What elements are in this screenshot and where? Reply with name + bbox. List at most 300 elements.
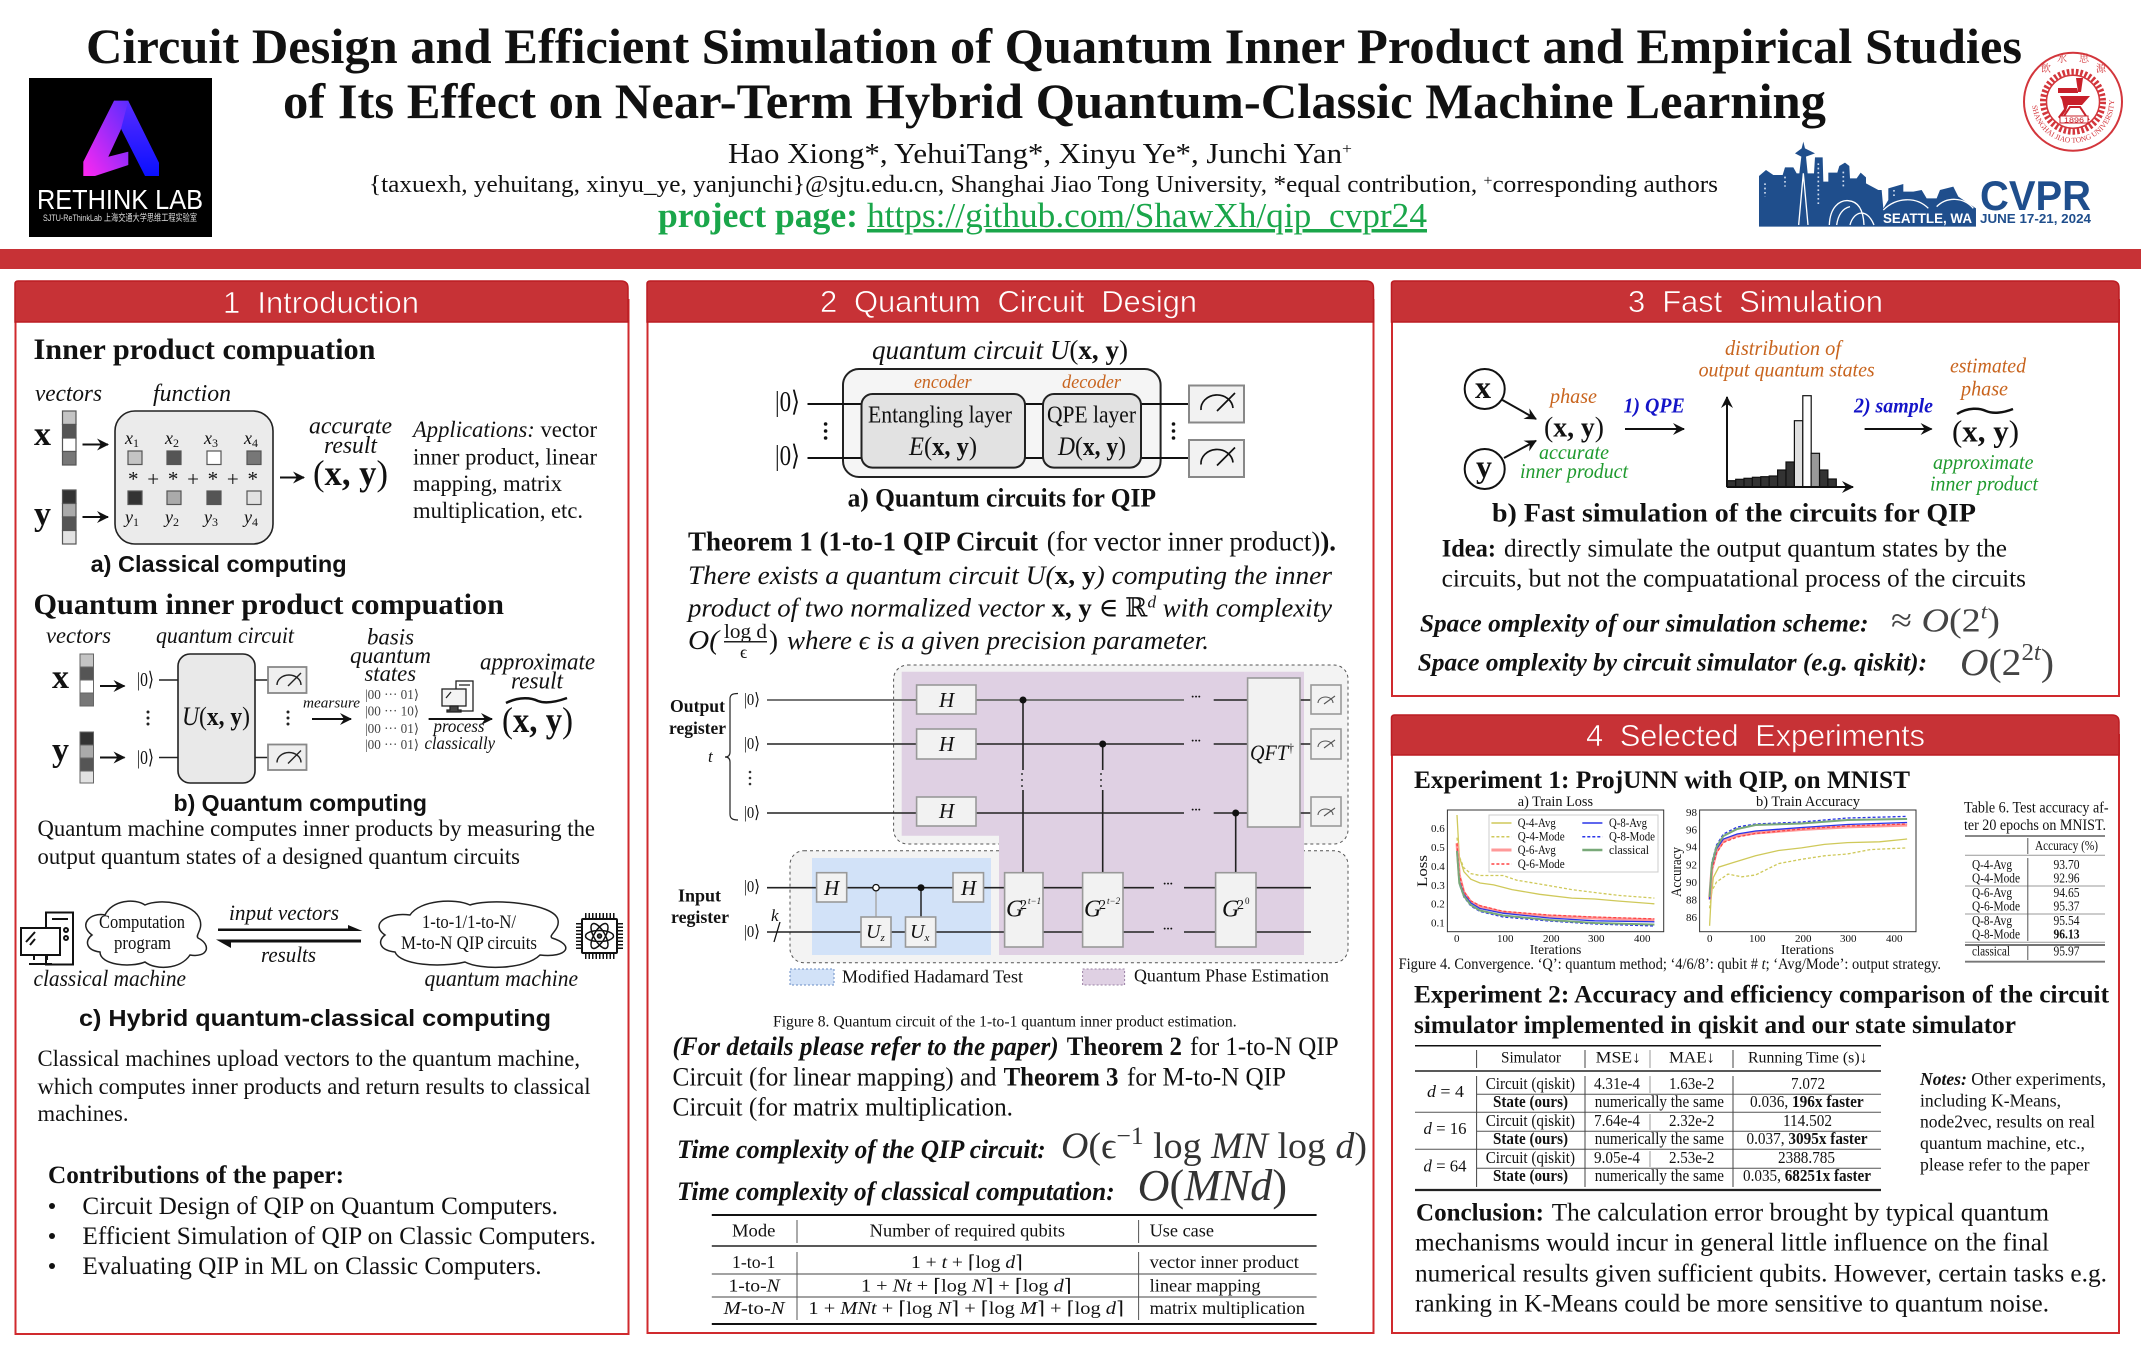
table: simulator comparison: 7.64e-4: [1594, 1111, 1640, 1130]
table: simulator comparison: MSE↓: [1596, 1050, 1641, 1067]
chart: train loss: 0.1: [1431, 918, 1445, 930]
caption: b) Quantum computing: b) Quantum computing: [174, 790, 427, 816]
gates: controlled G powers: 2: [1237, 898, 1244, 913]
table: QIP modes: M-to-N: [723, 1298, 786, 1318]
chart: train accuracy: 88: [1686, 894, 1698, 906]
text: applications: inner product, linear: [413, 444, 597, 470]
table: simulator comparison: d = 16: [1424, 1119, 1466, 1138]
text: notes: [1919, 1069, 2106, 1175]
chart: train accuracy: 0: [1707, 933, 1713, 945]
table 6: test accuracy: 94.65: [2054, 886, 2080, 901]
text: conclusion: mechanisms would incur in general little influence on the final: [1415, 1230, 2049, 1257]
diagram: b) quantum computing: quantum circuit: [156, 623, 295, 648]
chart legend: Q-6-Mode: [1518, 857, 1565, 871]
chart: quantum circuit of 1-to-1 QIP: |0⟩: [744, 734, 760, 753]
gates: Hadamard: H: [823, 876, 841, 900]
cloud: QIP circuits: M-to-N QIP circuits: [401, 933, 537, 954]
chart legend: Q-4-Avg: [1518, 816, 1556, 830]
chart: train loss: Loss: [1415, 855, 1431, 887]
diagram: c) hybrid computing: quantum machine: [424, 966, 578, 991]
diagram: b) quantum computing: |00 ··· 10⟩: [365, 704, 419, 718]
table: simulator comparison: 114.502: [1783, 1111, 1832, 1130]
diagram: c) hybrid computing: classical machine: [34, 966, 186, 991]
panel: 3 Fast Simulation: [1392, 281, 2119, 696]
heading: Experiment 1: Experiment 1: ProjUNN with QIP, on MNIST: [1414, 765, 1910, 794]
panel header: Fast Simulation: 3 Fast Simulation: [1628, 284, 1883, 319]
diagram: b) fast simulation: estimated: [1950, 354, 2026, 378]
chart: train accuracy: [1669, 794, 1916, 958]
diagram: b) fast simulation: 2) sample: [1853, 394, 1933, 418]
table: simulator comparison: MAE↓: [1669, 1050, 1715, 1067]
panel header: Introduction: 1 Introduction: [223, 285, 419, 320]
diagram: a) classical computing: y: [125, 507, 133, 527]
table: QIP modes: 1-to-N: [728, 1276, 781, 1296]
caption: figure 4: Figure 4. Convergence. ‘Q’: quantum method; ‘4/6/8’: qubit # t; ‘Avg/Mode’: output strategy.: [1399, 956, 1941, 973]
title: of Its Effect on Near-Term Hybrid Quantum-Classic Machine Learning: [283, 73, 1826, 129]
table: simulator comparison: 0.037, 3095x faster: [1746, 1129, 1868, 1148]
table 6: test accuracy: 92.96: [2054, 872, 2080, 887]
text: time complexity: Time complexity of the QIP circuit:: [677, 1135, 1046, 1164]
diagram: a) classical computing: x: [204, 428, 212, 448]
table: simulator comparison: Circuit (qiskit): [1486, 1074, 1575, 1093]
cloud: computation program: Computation: [99, 912, 185, 933]
legend: circuit regions: [790, 966, 1329, 987]
caption: c) Hybrid quantum-classical computing: c) Hybrid quantum-classical computing: [79, 1005, 551, 1031]
logo: Shanghai Jiao Tong University seal: 思: [2079, 50, 2090, 65]
table: simulator comparison: d = 4: [1427, 1082, 1465, 1101]
diagram: b) quantum computing: [46, 623, 595, 816]
diagram: b) quantum computing: process: [432, 716, 484, 736]
text: notes: quantum machine, etc.,: [1920, 1133, 2085, 1153]
panel: 2 Quantum Circuit Design: [647, 281, 1374, 1333]
chart: train loss: 200: [1543, 933, 1560, 945]
diagram: a) classical computing: y: [204, 507, 212, 527]
diagram: a) classical computing: x: [165, 428, 173, 448]
table: simulator comparison: 0.035, 68251x faster: [1743, 1166, 1871, 1185]
text: time complexity: −1: [1116, 1123, 1144, 1150]
text: space complexity: t: [1981, 600, 1989, 624]
diagram: a) classical computing: 2: [173, 436, 179, 450]
text: theorem 1: Theorem 1 (1-to-1 QIP Circuit: [688, 527, 1038, 557]
gates: Hadamard: H: [938, 688, 956, 712]
text: idea: circuits, but not the compuatational process of the circuits: [1442, 566, 2026, 593]
diagram: b) quantum computing: |00 ··· 01⟩: [365, 737, 419, 752]
gates: Hadamard: [817, 685, 984, 902]
diagram: b) fast simulation: 1) QPE: [1624, 394, 1685, 418]
diagram: a) classical computing: *+*+*+*: [128, 467, 258, 491]
gates: controlled G powers: 0: [1245, 896, 1250, 906]
chart: train accuracy: b) Train Accuracy: [1756, 794, 1860, 810]
gates: controlled G powers: t−1: [1028, 896, 1041, 906]
text: space complexity: ): [2041, 642, 2054, 684]
chart: train accuracy: 100: [1749, 933, 1766, 945]
diagram: a) classical computing: function: [153, 381, 231, 407]
diagram: a) classical computing: 1: [133, 436, 139, 450]
gate: inverse QFT: †: [1288, 740, 1294, 755]
table: simulator comparison: State (ours): [1493, 1092, 1568, 1111]
table 6: test accuracy: Q-4-Avg: [1972, 858, 2012, 873]
text: space complexity: ): [1987, 603, 2000, 640]
table: QIP modes: 1 + t + ⌈log d⌉: [911, 1252, 1023, 1272]
chart: quantum circuit of 1-to-1 QIP: [669, 665, 1348, 963]
diagram: b) quantum computing: x: [52, 659, 69, 696]
diagram: b) fast simulation: (x, y): [1952, 414, 2019, 449]
table 6: test accuracy: 96.13: [2054, 928, 2080, 943]
chart: quantum circuit of 1-to-1 QIP: ···: [1190, 733, 1202, 750]
text: theorems 2 and 3: Theorem 3: [1004, 1062, 1118, 1092]
diagram: a) quantum circuits for QIP: [775, 335, 1244, 513]
table: simulator comparison: State (ours): [1493, 1166, 1568, 1185]
diagram: b) quantum computing: U(x, y): [182, 702, 250, 731]
chart: train accuracy: 90: [1686, 877, 1698, 889]
diagram: b) quantum computing: classically: [424, 733, 495, 753]
project page link: https://github.com/ShawXh/qip_cvpr24: [867, 196, 1427, 235]
text: applications: [411, 417, 597, 523]
diagram: b) quantum computing: mearsure: [303, 696, 361, 712]
diagram: b) fast simulation: inner product: [1930, 472, 2039, 496]
chart legend: classical: [1609, 843, 1649, 857]
text: theorems 2 and 3: for M-to-N QIP: [1127, 1062, 1286, 1092]
chart: quantum circuit of 1-to-1 QIP: |0⟩: [744, 690, 760, 709]
gates: controlled U: x: [923, 932, 929, 944]
table: QIP modes: vector inner product: [1150, 1252, 1299, 1272]
chart: quantum circuit of 1-to-1 QIP: ···: [1190, 802, 1202, 819]
logo: Shanghai Jiao Tong University seal: [2023, 50, 2123, 152]
gates: controlled G powers: [1005, 873, 1256, 947]
gates: controlled G powers: 2: [1020, 898, 1027, 913]
table 6: test accuracy: Q-8-Avg: [1972, 914, 2012, 929]
red divider bar: [0, 249, 2141, 269]
text: theorems 2 and 3: [672, 1031, 1339, 1122]
text: quantum machine description: Quantum machine computes inner products by measuring the: [38, 816, 595, 841]
logo: Shanghai Jiao Tong University seal: 1896: [2064, 118, 2084, 124]
diagram: a) quantum circuits for QIP: decoder: [1062, 372, 1122, 393]
chart: train accuracy: Iterations: [1781, 943, 1834, 958]
diagram: a) classical computing: 3: [212, 515, 218, 529]
text: space complexity: ≈ O(2: [1891, 603, 1977, 640]
meters: [1311, 685, 1341, 826]
caption: a) Quantum circuits for QIP: a) Quantum circuits for QIP: [848, 484, 1156, 513]
diagram: b) fast simulation: [1465, 336, 2039, 528]
text: theorems 2 and 3: (For details please refer to the paper): [672, 1031, 1059, 1061]
table: simulator comparison: 1.63e-2: [1669, 1074, 1714, 1093]
chart: train loss: 300: [1588, 933, 1605, 945]
diagram: b) fast simulation: output quantum states: [1699, 358, 1875, 382]
text: idea: directly simulate the output quantum states by the: [1504, 536, 2007, 563]
diagram: b) quantum computing: |0⟩: [137, 747, 154, 769]
text: idea: [1442, 536, 2026, 593]
diagram: a) classical computing: y: [34, 496, 51, 533]
text: space complexity: Space omplexity by circuit simulator (e.g. qiskit):: [1418, 650, 1927, 677]
diagram: b) fast simulation: accurate: [1539, 440, 1609, 464]
chart: quantum circuit of 1-to-1 QIP: t: [708, 747, 714, 766]
diagram: c) hybrid computing: [21, 900, 620, 1031]
table: simulator comparison: numerically the same: [1595, 1129, 1724, 1148]
cloud: computation program: [86, 901, 206, 967]
logo: CVPR 2024 Seattle: [1759, 142, 2091, 227]
diagram: b) quantum computing: |0⟩: [137, 669, 154, 691]
text: time complexity: O(MNd): [1138, 1161, 1287, 1210]
diagram: b) fast simulation: distribution of: [1725, 336, 1844, 360]
text: notes: node2vec, results on real: [1920, 1112, 2095, 1132]
chart: quantum circuit of 1-to-1 QIP: |0⟩: [744, 877, 760, 896]
panel: 4 Selected Experiments: [1392, 715, 2119, 1333]
title: Circuit Design and Efficient Simulation of Quantum Inner Product and Empirical Studies: [86, 18, 2022, 74]
diagram: a) classical computing: accurate: [309, 414, 392, 440]
text: theorem 1: d: [1147, 593, 1157, 612]
diagram: a) quantum circuits for QIP: encoder: [914, 372, 972, 393]
logo: CVPR 2024 Seattle: CVPR: [1980, 172, 2091, 219]
text: time complexity: MN log d): [1211, 1126, 1367, 1167]
logo: Shanghai Jiao Tong University seal: SHANGHAI JIAO TONG UNIVERSITY: [2032, 100, 2114, 143]
diagram: b) quantum computing: basis: [367, 624, 414, 650]
table: QIP modes: [712, 1215, 1317, 1324]
chart: train accuracy: Accuracy: [1669, 847, 1685, 897]
panel header: Fast Simulation: [1392, 281, 2119, 322]
diagram: a) classical computing: 4: [252, 515, 258, 529]
text: theorem 1: log d: [724, 621, 767, 643]
diagram: b) quantum computing: vectors: [46, 623, 111, 648]
diagram: c) hybrid computing: input vectors: [229, 900, 339, 925]
chart: quantum circuit of 1-to-1 QIP: Input: [678, 886, 721, 906]
gates: Hadamard: H: [960, 876, 978, 900]
title: [86, 18, 2022, 129]
text: theorems 2 and 3: Circuit (for matrix multiplication.: [672, 1092, 1013, 1122]
heading: Experiment 2: simulator implemented in qiskit and our state simulator: [1414, 1012, 2016, 1039]
text: theorem 1: product of two normalized vector x, y ∈ ℝ: [688, 593, 1147, 623]
icon: small computer: [442, 681, 473, 712]
text: theorems 2 and 3: Circuit (for linear mapping) and: [672, 1062, 996, 1092]
authors: +: [1342, 141, 1352, 158]
table: QIP modes: linear mapping: [1150, 1276, 1261, 1296]
diagram: b) fast simulation: phase: [1548, 384, 1597, 408]
diagram: b) fast simulation: inner product: [1520, 459, 1629, 483]
gates: Hadamard: H: [938, 799, 956, 823]
table 6: test accuracy: 93.70: [2054, 858, 2080, 873]
table: simulator comparison: State (ours): [1493, 1129, 1568, 1148]
table 6: test accuracy: Accuracy (%): [2035, 839, 2098, 854]
table: QIP modes: matrix multiplication: [1150, 1298, 1305, 1318]
table: simulator comparison: 2388.785: [1778, 1148, 1835, 1167]
text: theorem 1: (for vector inner product)).: [1047, 527, 1336, 557]
chart: train accuracy: 98: [1686, 807, 1698, 819]
panel header: Selected Experiments: [1392, 715, 2119, 755]
text: space complexity: 2: [2021, 640, 2034, 666]
chart: train loss: 0.6: [1431, 823, 1445, 835]
affiliations: +: [1484, 173, 1492, 189]
table 6: test accuracy: Q-4-Mode: [1972, 872, 2020, 887]
text: conclusion: ranking in K-Means could be more sensitive to quantum noise.: [1415, 1291, 2049, 1318]
diagram: a) classical computing: 4: [252, 436, 258, 450]
cloud: computation program: program: [114, 933, 171, 954]
chart: quantum circuit of 1-to-1 QIP: k: [771, 906, 779, 925]
logo: Rethink Lab: SJTU-ReThinkLab 上海交通大学思维工程实验室: [43, 212, 197, 224]
chart: train loss: 400: [1634, 933, 1651, 945]
diagram: c) hybrid computing: results: [261, 942, 316, 967]
gates: controlled G powers: t−2: [1107, 896, 1121, 906]
logo: Rethink Lab: RETHINK LAB: [37, 184, 203, 215]
chart: train loss: a) Train Loss: [1518, 794, 1593, 810]
text: theorems 2 and 3: Theorem 2: [1067, 1031, 1182, 1061]
diagram: b) quantum computing: (x, y): [502, 700, 573, 740]
table 6: test accuracy: Q-6-Mode: [1972, 900, 2020, 915]
panel header: Quantum Circuit Design: [647, 281, 1374, 322]
text: space complexity: t: [2034, 640, 2042, 666]
text: theorem 1: [686, 527, 1336, 662]
chart: quantum circuit of 1-to-1 QIP: register: [671, 907, 729, 927]
diagram: a) quantum circuits for QIP: Entangling layer: [868, 403, 1012, 429]
table: simulator comparison: 4.31e-4: [1594, 1074, 1640, 1093]
table 6: test accuracy: 95.37: [2054, 900, 2080, 915]
gate: inverse QFT: QFT: [1250, 740, 1292, 765]
logo: CVPR 2024 Seattle: JUNE 17-21, 2024: [1980, 212, 2091, 226]
text: space complexity: O(2: [1960, 642, 2020, 684]
project page link: project page:: [658, 196, 858, 235]
chart legend: Q-4-Mode: [1518, 830, 1565, 844]
legend: circuit regions: Quantum Phase Estimation: [1134, 966, 1329, 986]
text: theorem 1: There exists a quantum circuit U( x, y) computing the inner: [688, 560, 1333, 590]
text: time complexity: Time complexity of classical computation:: [677, 1177, 1115, 1206]
text: theorem 1: with complexity: [1156, 593, 1332, 623]
diagram: a) classical computing: x: [125, 428, 133, 448]
table: QIP modes: Mode: [732, 1221, 775, 1241]
diagram: a) classical computing: 3: [212, 436, 218, 450]
diagram: a) quantum circuits for QIP: |0⟩: [775, 441, 800, 472]
chart: train accuracy: 400: [1886, 933, 1903, 945]
chart legend: Q-8-Mode: [1609, 830, 1655, 844]
chart: quantum circuit of 1-to-1 QIP: ···: [1162, 921, 1174, 938]
logo: Shanghai Jiao Tong University seal: 水: [2057, 50, 2067, 65]
logo: Rethink Lab: [29, 78, 212, 237]
logo: Shanghai Jiao Tong University seal: 源: [2096, 60, 2107, 75]
text: conclusion: Conclusion:: [1416, 1200, 1544, 1227]
chart: quantum circuit of 1-to-1 QIP: |0⟩: [744, 803, 760, 822]
table: simulator comparison: numerically the same: [1595, 1166, 1724, 1185]
text: hybrid description: Classical machines upload vectors to the quantum machine,: [38, 1046, 580, 1071]
table 6: test accuracy: Q-6-Avg: [1972, 886, 2012, 901]
chart: quantum circuit of 1-to-1 QIP: ···: [1190, 689, 1202, 706]
chart: quantum circuit of 1-to-1 QIP: |0⟩: [744, 922, 760, 941]
text: time complexity: [677, 1123, 1367, 1210]
chart: train loss: 100: [1497, 933, 1514, 945]
text: theorems 2 and 3: for 1-to-N QIP: [1190, 1031, 1339, 1061]
chart: train accuracy: 200: [1795, 933, 1812, 945]
heading: Quantum inner product compuation: Quantum inner product compuation: [34, 588, 504, 621]
heading: Inner product compuation: Inner product compuation: [34, 333, 376, 366]
heading: Experiment 2: [1414, 982, 2110, 1039]
table: simulator comparison: 9.05e-4: [1594, 1148, 1640, 1167]
chart legend: [1489, 815, 1658, 872]
table: simulator comparison: 7.072: [1791, 1074, 1825, 1093]
text: notes: please refer to the paper: [1920, 1155, 2090, 1175]
legend: circuit regions: Modified Hadamard Test: [842, 967, 1023, 987]
table: QIP modes: 1-to-1: [732, 1252, 775, 1272]
text: hybrid description: [38, 1046, 590, 1126]
text: quantum machine description: [38, 816, 595, 869]
table: simulator comparison: 2.53e-2: [1669, 1148, 1714, 1167]
diagram: a) quantum circuits for QIP: E(x, y): [908, 432, 977, 461]
panel header: Selected Experiments: 4 Selected Experiments: [1586, 718, 1925, 753]
text: space complexity: [1418, 600, 2054, 684]
table: simulator comparison: Circuit (qiskit): [1486, 1111, 1575, 1130]
chart: train loss: 0.5: [1431, 842, 1445, 854]
diagram: a) classical computing: 1: [133, 515, 139, 529]
caption: figure 8: Figure 8. Quantum circuit of the 1-to-1 quantum inner product estimation.: [773, 1014, 1237, 1031]
chart: train accuracy: 92: [1686, 859, 1697, 871]
gates: Hadamard: H: [938, 732, 956, 756]
diagram: a) classical computing: y: [165, 507, 173, 527]
chart: train accuracy: 96: [1686, 824, 1698, 836]
text: applications: multiplication, etc.: [413, 498, 583, 523]
icon: classical computer: [21, 912, 73, 964]
chart: train loss: 0.4: [1431, 861, 1445, 873]
diagram: a) quantum circuits for QIP: quantum circuit U(x, y): [872, 335, 1128, 365]
chart: quantum circuit of 1-to-1 QIP: ···: [1162, 876, 1174, 893]
cloud: QIP circuits: [379, 901, 566, 967]
diagram: a) classical computing: x: [34, 416, 51, 453]
gates: controlled U: [861, 917, 936, 947]
heading: Experiment 2: Experiment 2: Accuracy and efficiency comparison of the circuit: [1414, 982, 2110, 1009]
text: contributions of the paper: Efficient Simulation of QIP on Classic Computers.: [82, 1223, 596, 1250]
table: QIP modes: 1 + MNt + ⌈log N⌉ + ⌈log M⌉ + ⌈log d⌉: [808, 1298, 1124, 1318]
text: contributions of the paper: Contributions of the paper:: [48, 1162, 344, 1189]
text: time complexity: log: [1144, 1126, 1211, 1167]
table: simulator comparison: d = 64: [1424, 1157, 1467, 1176]
panel header: Quantum Circuit Design: 2 Quantum Circuit Design: [820, 284, 1197, 319]
diagram: a) quantum circuits for QIP: QPE layer: [1047, 403, 1136, 429]
gates: controlled U: U: [866, 921, 880, 943]
text: time complexity: O(ϵ: [1061, 1126, 1116, 1167]
text: space complexity: Space omplexity of our simulation scheme:: [1420, 611, 1868, 638]
table: QIP modes: Use case: [1150, 1221, 1214, 1241]
diagram: a) classical computing: (x, y): [313, 453, 388, 493]
diagram: a) classical computing: [34, 381, 392, 577]
diagram: b) fast simulation: approximate: [1933, 450, 2034, 474]
text: theorem 1: ϵ: [740, 642, 747, 662]
diagram: b) quantum computing: |00 ··· 01⟩: [365, 687, 419, 702]
chart: train accuracy: 86: [1686, 912, 1698, 924]
gate: inverse QFT: [1248, 678, 1300, 827]
chart: train accuracy: 94: [1686, 842, 1698, 854]
table 6: test accuracy: Table 6. Test accuracy af-: [1964, 800, 2109, 817]
chart: quantum circuit of 1-to-1 QIP: register: [669, 718, 726, 738]
diagram: a) classical computing: x: [244, 428, 252, 448]
table: simulator comparison: 2.32e-2: [1669, 1111, 1714, 1130]
text: theorem 1: ): [769, 625, 778, 655]
text: notes: Notes: Other experiments,: [1919, 1069, 2106, 1089]
text: conclusion: The calculation error brought by typical quantum: [1552, 1200, 2050, 1227]
diagram: b) quantum computing: approximate: [480, 650, 595, 676]
text: conclusion: numerical results given sufficient qubits. However, certain tasks e.g.: [1415, 1261, 2107, 1288]
table 6: test accuracy: Q-8-Mode: [1972, 928, 2020, 943]
text: applications: mapping, matrix: [413, 471, 562, 496]
chart: quantum circuit of 1-to-1 QIP: Output: [670, 696, 725, 716]
gates: controlled G powers: G: [1222, 897, 1239, 923]
text: contributions of the paper: Evaluating QIP in ML on Classic Computers.: [82, 1253, 542, 1280]
affiliations: {taxuexh, yehuitang, xinyu_ye, yanjunchi}@sjtu.edu.cn, Shanghai Jiao Tong University, *equal contribution,: [369, 172, 1420, 198]
diagram: b) quantum computing: |00 ··· 01⟩: [365, 721, 419, 736]
chart: train loss: 0: [1454, 933, 1460, 945]
caption: b) Fast simulation of the circuits for QIP: b) Fast simulation of the circuits for QIP: [1492, 498, 1976, 528]
table: simulator comparison: numerically the same: [1595, 1092, 1724, 1111]
diagram: b) fast simulation: (x, y): [1544, 413, 1604, 444]
chart legend: Q-8-Avg: [1609, 816, 1648, 830]
logo: CVPR 2024 Seattle: SEATTLE, WA: [1883, 211, 1972, 226]
table: QIP modes: 1 + Nt + ⌈log N⌉ + ⌈log d⌉: [861, 1276, 1072, 1296]
table: simulator comparison: Simulator: [1501, 1050, 1562, 1067]
text: hybrid description: machines.: [38, 1101, 128, 1126]
diagram: a) classical computing: vectors: [35, 381, 102, 407]
